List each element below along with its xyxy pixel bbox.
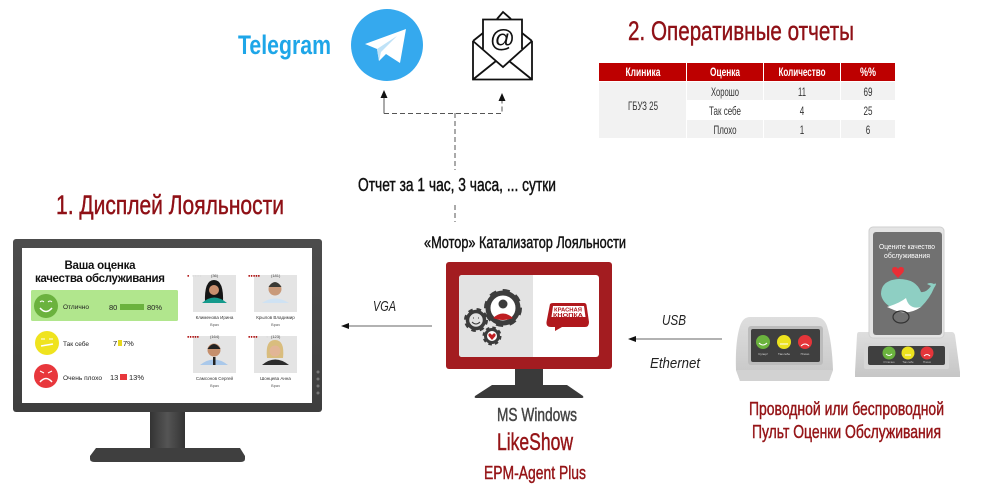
doctor card 2: Крылов Владимир (256, 315, 295, 320)
rating row: very bad: 13% (129, 373, 144, 382)
doctor card 4: (123) (271, 334, 281, 339)
table: report: Оценка (710, 65, 740, 79)
text: EPM-Agent Plus: EPM-Agent Plus (484, 463, 586, 483)
device: wireless stand with screen (855, 227, 960, 377)
rating row: so-so: Так себе (63, 340, 89, 348)
doctor card 1: Клименова Ирина (196, 315, 234, 320)
rating row: excellent: Отлично (63, 304, 89, 311)
doctor card 3: (164) (210, 334, 220, 339)
label: VGA: VGA (373, 298, 396, 315)
table: report: 69 (864, 85, 873, 99)
rating row: excellent: 80 (109, 303, 117, 312)
icon: Telegram (351, 9, 423, 81)
doctor card 3 (187, 334, 236, 388)
arrow: VGA (341, 323, 432, 329)
label: Ethernet: Ethernet (650, 355, 701, 372)
doctor card 1: Врач (210, 323, 219, 327)
icon: email envelope: @ (490, 25, 515, 53)
text: rate the service on screen (879, 244, 935, 260)
table: report: Так себе (709, 104, 741, 118)
text: remote caption: Пульт Оценки Обслуживания (752, 422, 941, 442)
logo: red button: КРАСНАЯ (554, 308, 582, 314)
logo: red button: КНОПКА (553, 313, 584, 319)
heading: rate the service: Ваша оценка (64, 260, 136, 272)
rating row: very bad (34, 364, 144, 388)
doctor card 1: ●●●● (192, 273, 202, 278)
rating row: very bad: Очень плохо (63, 375, 102, 382)
table: report: 4 (800, 104, 804, 118)
device: wired remote: Плохо (801, 352, 810, 356)
icon: large gear (487, 292, 519, 324)
device: wired remote: Супер! (758, 352, 768, 356)
table: report: %% (860, 65, 876, 79)
heading: operational reports: 2. Оперативные отчеты (628, 16, 854, 46)
doctor card 4: ●●●● (248, 334, 258, 339)
rating row: so-so: 7 (113, 339, 117, 348)
heading: rate the service (35, 260, 165, 285)
doctor card 1: (36) (211, 273, 219, 278)
icon: heart (892, 267, 904, 278)
panel: loyalty display monitor (13, 239, 322, 462)
doctor card 1: ● (187, 273, 190, 278)
rating row: excellent (31, 290, 178, 321)
text: report period: Отчет за 1 час, 3 часа, ... сутки (358, 175, 556, 195)
heading: rate the service: качества обслуживания (35, 273, 165, 285)
arrow: USB and Ethernet (628, 336, 722, 342)
text: MS Windows: MS Windows (497, 405, 577, 425)
doctor card 3: Врач (210, 384, 219, 388)
heading: loyalty display: 1. Дисплей Лояльности (56, 190, 284, 220)
table: report: 6 (866, 123, 870, 137)
table: report (599, 63, 895, 138)
doctor card 2 (248, 273, 297, 327)
text: remote caption: Проводной или беспроводной (749, 399, 944, 419)
device: wireless stand with screen: Отлично (883, 360, 895, 364)
title: Telegram label: Telegram (238, 30, 331, 60)
arrows: report delivery (380, 90, 506, 222)
device: wired remote (736, 317, 833, 381)
rating row: so-so (35, 331, 134, 355)
table: report: Количество (778, 65, 826, 79)
text: rate the service on screen: обслуживания (884, 252, 930, 260)
table: report: Плохо (714, 123, 737, 137)
doctor card 4: Шонцева Анна (260, 376, 291, 381)
doctor card 1 (187, 273, 236, 327)
rating row: excellent: 80% (147, 303, 162, 312)
text: engine caption: «Мотор» Катализатор Лояльности (424, 234, 626, 252)
text: LikeShow: LikeShow (497, 429, 573, 456)
table: report: Хорошо (711, 85, 739, 99)
icon: heart gear (484, 328, 500, 344)
device: wired remote: Так себе (778, 352, 790, 356)
doctor card 4: Врач (271, 384, 280, 388)
table: report: ГБУЗ 25 (628, 99, 658, 113)
table: report: Клиника (626, 65, 661, 79)
doctor card 2: Врач (271, 323, 280, 327)
icon: email envelope (473, 12, 532, 80)
doctor card 2: (181) (271, 273, 281, 278)
doctor card 2: ●●●●● (248, 273, 261, 278)
icon: whale (881, 279, 936, 323)
label: USB: USB (662, 312, 686, 329)
text: remote caption (749, 399, 944, 442)
rating row: so-so: 7% (123, 339, 134, 348)
icon: smile gear (466, 310, 486, 330)
logo: red button (546, 303, 589, 331)
table: report: 1 (800, 123, 804, 137)
rating row: very bad: 13 (110, 373, 118, 382)
doctor card 3: ●●●●● (187, 334, 200, 339)
text: rate the service on screen: Оцените качество (879, 244, 935, 251)
doctor card 4: ● (266, 334, 269, 339)
panel: engine monitor (446, 262, 612, 398)
doctor card 3: Самсонов Сергей (196, 375, 234, 381)
device: wireless stand with screen: Плохо (923, 360, 932, 364)
table: report: 25 (864, 104, 873, 118)
table: report: 11 (798, 85, 806, 99)
device: wireless stand with screen: Так себе (902, 360, 914, 364)
doctor card 4 (248, 334, 297, 388)
